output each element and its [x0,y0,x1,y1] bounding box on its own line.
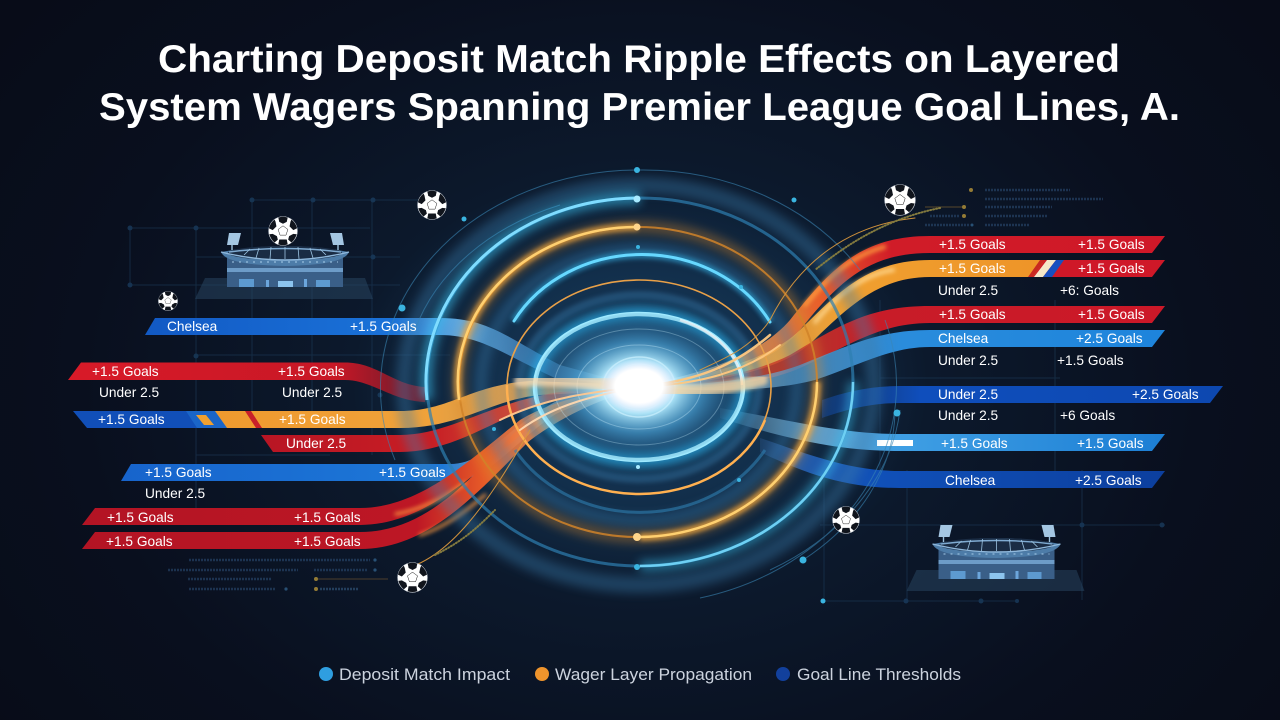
title: Charting Deposit Match Ripple Effects on Layered [158,38,1120,81]
football icons [158,185,915,592]
ribbon: red middle right [640,306,1165,387]
left bar labels: +1.5 Goals [279,412,346,427]
right bar labels: +1.5 Goals [1078,307,1145,322]
right bar labels: Chelsea [945,473,996,488]
legend: deposit match impact: Deposit Match Impact [339,665,510,684]
legend: wager layer propagation: Wager Layer Propagation [555,665,752,684]
concentric ripple rings [381,170,900,598]
thin orange ring [507,280,771,494]
right bar labels: +1.5 Goals [1057,353,1124,368]
right bar labels: +1.5 Goals [941,436,1008,451]
ribbon: Chelsea blue [145,318,640,387]
outer thin rings [381,170,900,598]
left bar labels: +1.5 Goals [98,412,165,427]
legend: goal line thresholds: Goal Line Thresholds [797,665,961,684]
wide blue bands [404,185,874,585]
legend [319,665,961,684]
central glow [535,313,743,461]
right bar labels: +6 Goals [1060,408,1115,423]
left bar labels: Under 2.5 [282,385,342,400]
right bar labels: +1.5 Goals [1078,261,1145,276]
ribbon: red Under 2.5 [261,387,640,452]
right bar labels: +6: Goals [1060,283,1119,298]
right bar labels: Chelsea [938,331,989,346]
right bar labels: +1.5 Goals [939,307,1006,322]
ribbon: red lower one [82,387,640,525]
right ribbons [640,236,1223,488]
orange ring [458,227,817,537]
ribbon: light blue right [720,408,1165,451]
network grid background [128,198,1165,604]
ribbon: red top right [640,236,1165,385]
right bar labels: Under 2.5 [938,408,998,423]
left bar labels: +1.5 Goals [278,364,345,379]
ribbon: dark blue right [822,386,1223,418]
micro data text lines right [925,188,1103,226]
left bar labels: Under 2.5 [286,436,346,451]
ribbon: red top [68,362,425,402]
left bar labels: Under 2.5 [99,385,159,400]
right bar labels: +1.5 Goals [939,237,1006,252]
core cyan ring [535,314,743,460]
ribbon: blue lower [121,387,640,481]
left bar labels: +1.5 Goals [379,465,446,480]
stadium right [906,525,1084,591]
left bar labels: +1.5 Goals [107,510,174,525]
right bar labels: +2.5 Goals [1132,387,1199,402]
left bar labels [92,319,446,549]
right bar labels: Under 2.5 [938,387,998,402]
right bar labels: +2.5 Goals [1075,473,1142,488]
title [99,38,1180,129]
ribbon: blue orange mixed [73,381,640,428]
ribbon highlights [396,247,893,535]
left bar labels: +1.5 Goals [145,465,212,480]
left ribbons [68,318,640,549]
inner cyan arc [514,255,770,512]
large cyan ring [426,198,853,566]
micro data text lines left [168,558,388,591]
right bar labels: +1.5 Goals [1077,436,1144,451]
stadium left [195,233,373,299]
right bar labels: +1.5 Goals [939,261,1006,276]
right bar labels: Under 2.5 [938,353,998,368]
left bar labels: Under 2.5 [145,486,205,501]
white dash [877,440,913,446]
left bar labels: +1.5 Goals [92,364,159,379]
title: System Wagers Spanning Premier League Goal Lines, A. [99,86,1180,129]
right bar labels: +2.5 Goals [1076,331,1143,346]
converging streaks [400,208,940,570]
ribbon: Chelsea blue right [640,330,1165,390]
ring nodes [398,167,900,604]
left bar labels: +1.5 Goals [294,510,361,525]
ribbon: dark blue lower right [760,438,1165,488]
left bar labels: Chelsea [167,319,218,334]
right bar labels: Under 2.5 [938,283,998,298]
left bar labels: +1.5 Goals [350,319,417,334]
right bar labels [938,237,1199,488]
right bar labels: +1.5 Goals [1078,237,1145,252]
ribbon: red lower two [82,388,640,549]
left bar labels: +1.5 Goals [106,534,173,549]
central bright core [599,358,679,414]
ribbon: orange and red right [640,260,1165,386]
left bar labels: +1.5 Goals [294,534,361,549]
